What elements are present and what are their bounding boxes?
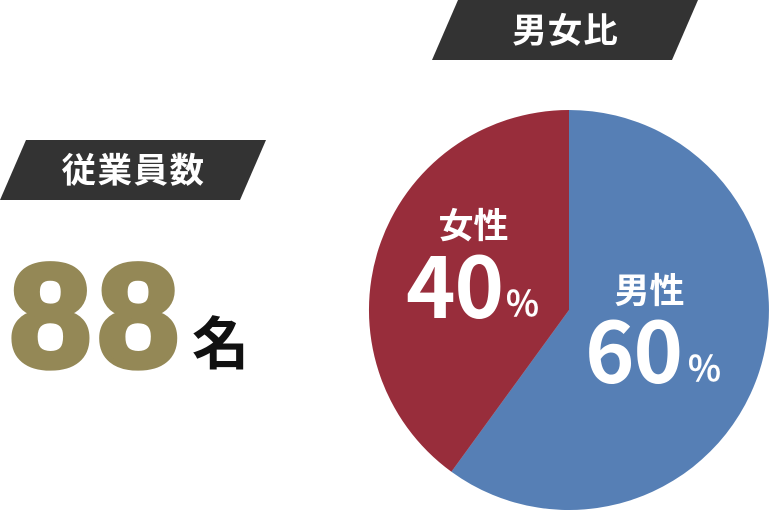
employee count value: 88 [10,234,185,398]
heading: gender ratio banner: 男女比 [512,2,619,52]
panel: gender ratio [369,0,769,510]
label: female 40%: % [506,276,539,327]
panel: employee count [0,140,266,398]
pie slice: female 40% [369,110,569,472]
label: female 40% [406,198,539,343]
heading: employee count banner [0,140,266,200]
label: male 60%: 男性 [614,263,685,314]
label: female 40%: 40 [406,222,503,343]
label: male 60%: 60 [585,287,682,408]
heading: gender ratio banner [432,0,698,60]
employee count value: 名 [192,299,249,381]
pie chart [369,110,769,510]
label: male 60%: % [688,341,721,392]
label: male 60% [585,263,721,408]
label: female 40%: 女性 [438,198,509,249]
pie slice: male 60% [451,110,769,510]
heading: employee count banner: 従業員数 [62,142,206,192]
